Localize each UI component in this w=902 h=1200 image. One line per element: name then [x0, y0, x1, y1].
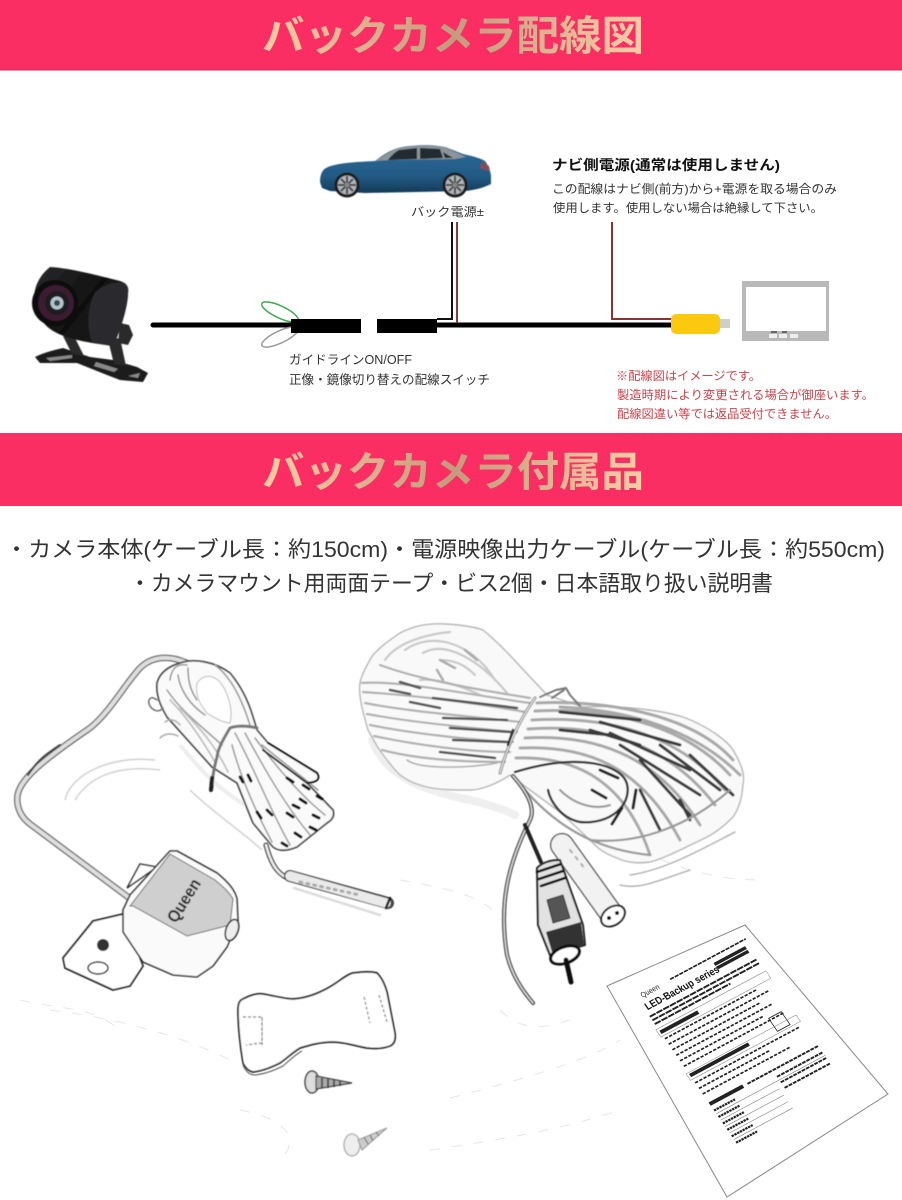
text block: accessory list: [5, 537, 885, 596]
RCA plug collar: [546, 922, 584, 955]
RCA plug body: [537, 860, 585, 955]
text block: accessory list: ・カメラマウント用両面テープ・ビス2個・日本語取り扱い説明書: [129, 571, 773, 596]
icon: camera-side cable: [153, 322, 292, 328]
icon: guideline switch loops: [259, 298, 301, 351]
short cable wire: [17, 658, 187, 897]
camera lens stub: [223, 918, 241, 942]
text block: navi side power: 使用します。使用しない場合は絶縁して下さい。: [553, 200, 823, 215]
bracket screw: [97, 939, 109, 951]
small cable plug: [266, 845, 390, 915]
main cable to monitor: [437, 322, 672, 328]
left bundle dark strands: [390, 682, 517, 758]
heading band: wiring diagram: [0, 0, 902, 70]
navi power wire: [612, 222, 672, 319]
camera top panel: [130, 854, 233, 936]
right bundle light strands: [516, 703, 740, 855]
icon: blue car: [320, 145, 491, 198]
red caution note: 製造時期により変更される場合が御座います。: [617, 387, 874, 402]
illustration: long power video cable: [360, 624, 744, 1003]
RCA cable lead: [525, 825, 541, 862]
bare power wire: [504, 776, 533, 1003]
manual text rows: [634, 939, 845, 1144]
reverse power wires: [437, 222, 457, 323]
icon: monitor: [742, 281, 829, 341]
bracket hole: [88, 962, 108, 974]
label: guideline switch: ガイドラインON/OFF: [289, 353, 412, 367]
camera brand mark: Queen: [163, 875, 205, 926]
icon: yellow RCA connector: [671, 314, 730, 334]
cable coil outline: [360, 624, 744, 863]
cable connector blocks: [291, 319, 437, 333]
label: guideline switch: 正像・鏡像切り替えの配線スイッチ: [289, 372, 490, 387]
red caution note: [616, 368, 874, 421]
inner cable loop: [515, 762, 628, 822]
upper loop strands: [385, 632, 507, 695]
heading band: accessories: バックカメラ付属品: [262, 449, 644, 495]
heading band: wiring diagram: バックカメラ配線図: [262, 13, 644, 59]
manual series title: LED-Backup series: [643, 964, 723, 1013]
red caution note: 配線図違い等では返品受付できません。: [617, 406, 837, 421]
bracket tab: [127, 864, 157, 888]
text block: accessory list: ・カメラ本体(ケーブル長：約150cm)・電源映像出力ケーブル(ケーブル長：約550cm): [5, 537, 885, 562]
camera bracket: [63, 914, 143, 990]
text block: navi side power: [552, 157, 837, 215]
small cable coil: [149, 661, 334, 850]
text block: navi side power: ナビ側電源(通常は使用しません): [552, 157, 780, 173]
shadow of cable curve: [65, 745, 262, 850]
RCA plug ribs: [537, 864, 565, 886]
left bundle light strands: [362, 665, 530, 762]
faint floor sketch marks: [20, 850, 760, 1160]
label: reverse power: バック電源±: [411, 205, 484, 219]
heading band: accessories: [0, 433, 902, 506]
text block: navi side power: この配線はナビ側(前方)から+電源を取る場合のみ: [552, 181, 837, 196]
manual sheet: [607, 925, 888, 1197]
label: guideline switch: [289, 353, 490, 387]
illustration: instruction manual: [607, 925, 888, 1197]
illustration: camera with short cable: [17, 658, 390, 990]
coil ground shadow: [372, 740, 515, 815]
right bundle dark strands: [560, 712, 733, 830]
floor shadow marks: [620, 832, 735, 886]
red caution note: ※配線図はイメージです。: [616, 368, 761, 383]
power plug: [562, 845, 610, 912]
manual printed content: [632, 935, 845, 1144]
illustration: double-sided mounting tape: [238, 972, 395, 1075]
illustration: screw one: [305, 1071, 352, 1093]
RCA plug label patch: [547, 895, 570, 923]
cable tie: [500, 698, 535, 773]
illustration: screw two: [344, 1128, 387, 1156]
RCA plug tip: [548, 942, 582, 968]
icon: rear camera photo: [32, 267, 148, 382]
camera body: [123, 851, 238, 977]
manual header: Queen: [638, 982, 661, 1000]
